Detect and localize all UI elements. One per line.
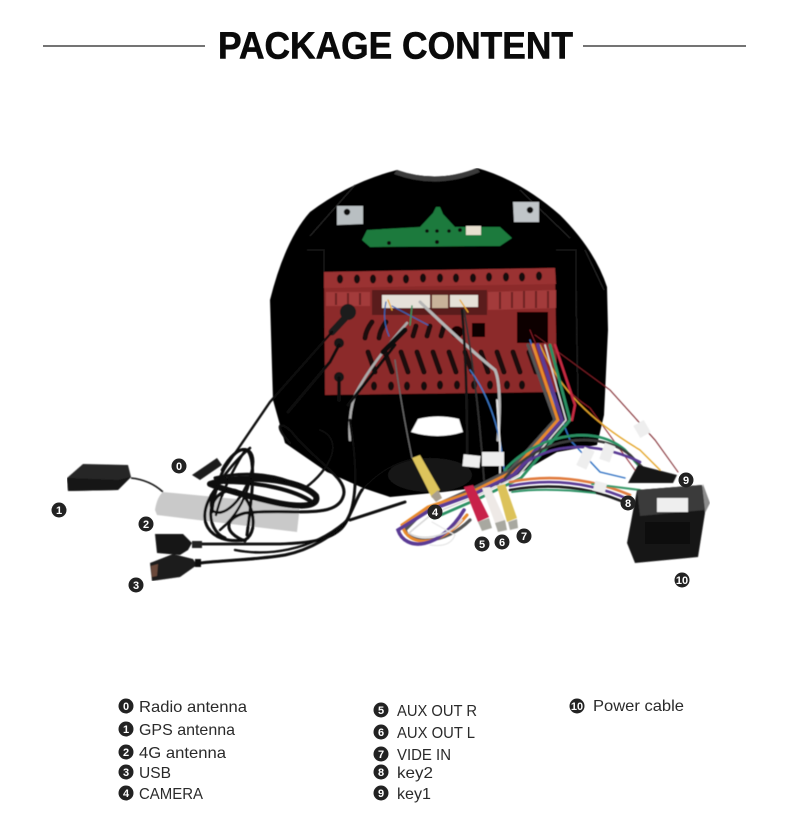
photo callout numbers: 2 [143,519,149,531]
housing: black rounded back shell [270,168,608,497]
legend column 1: GPS antenna [139,722,235,739]
photo callout numbers: 7 [521,531,527,543]
legend column 1: 3 [123,767,129,779]
wire tags [462,420,651,493]
legend column 1: Radio antenna [139,699,247,716]
green circuit board [362,207,512,247]
legend column 2: 6 [378,727,384,739]
legend column 2: 9 [378,788,384,800]
photo callout numbers: 3 [133,580,139,592]
black plugs and left-side cables [225,304,356,468]
photo callout numbers: 10 [676,575,688,587]
legend column 2: AUX OUT R [397,703,477,720]
title: PACKAGE CONTENT [218,26,573,68]
photo callout numbers [52,458,694,592]
photo callout numbers: 8 [625,498,631,510]
white and beige connectors [382,295,478,308]
legend column 1: 2 [123,747,129,759]
wiring harness [398,330,678,546]
legend column 1: USB [139,765,171,782]
photo callout numbers: 9 [683,475,689,487]
legend column 1: 4G antenna [139,745,226,762]
panel plugged wires [348,300,505,485]
power cable connector [627,484,710,563]
legend column 1: 0 [123,701,129,713]
legend column 2: 7 [378,749,384,761]
USB connectors [150,534,202,581]
photo callout numbers: 1 [56,505,62,517]
GPS antenna puck [67,464,163,492]
key connector [628,465,677,483]
legend column 2: AUX OUT L [397,725,475,742]
photo callout numbers: 4 [432,507,439,519]
photo callout numbers: 6 [499,537,505,549]
legend column 2: 5 [378,705,384,717]
legend column 2 [374,702,477,803]
legend column 3: Power cable [593,698,684,715]
legend column 3: 10 [571,701,583,713]
legend column 2: key2 [397,765,433,782]
legend column 1: CAMERA [139,786,203,803]
legend column 1: 1 [123,724,129,736]
legend column 2: VIDE IN [397,747,451,764]
legend column 2: 8 [378,767,384,779]
camera RCA plug [412,455,442,502]
product photo: head unit and cables [67,168,710,581]
red rear panel [324,268,557,395]
cable coils [200,420,420,563]
photo callout numbers: 5 [479,539,485,551]
radio antenna connector [192,458,222,480]
legend column 1 [118,698,247,803]
legend column 1: 4 [123,788,130,800]
red white yellow RCA plugs [464,484,518,532]
mounting brackets [337,202,539,225]
4G antenna strip [155,492,300,532]
photo callout numbers: 0 [176,461,182,473]
legend column 2: key1 [397,786,431,803]
